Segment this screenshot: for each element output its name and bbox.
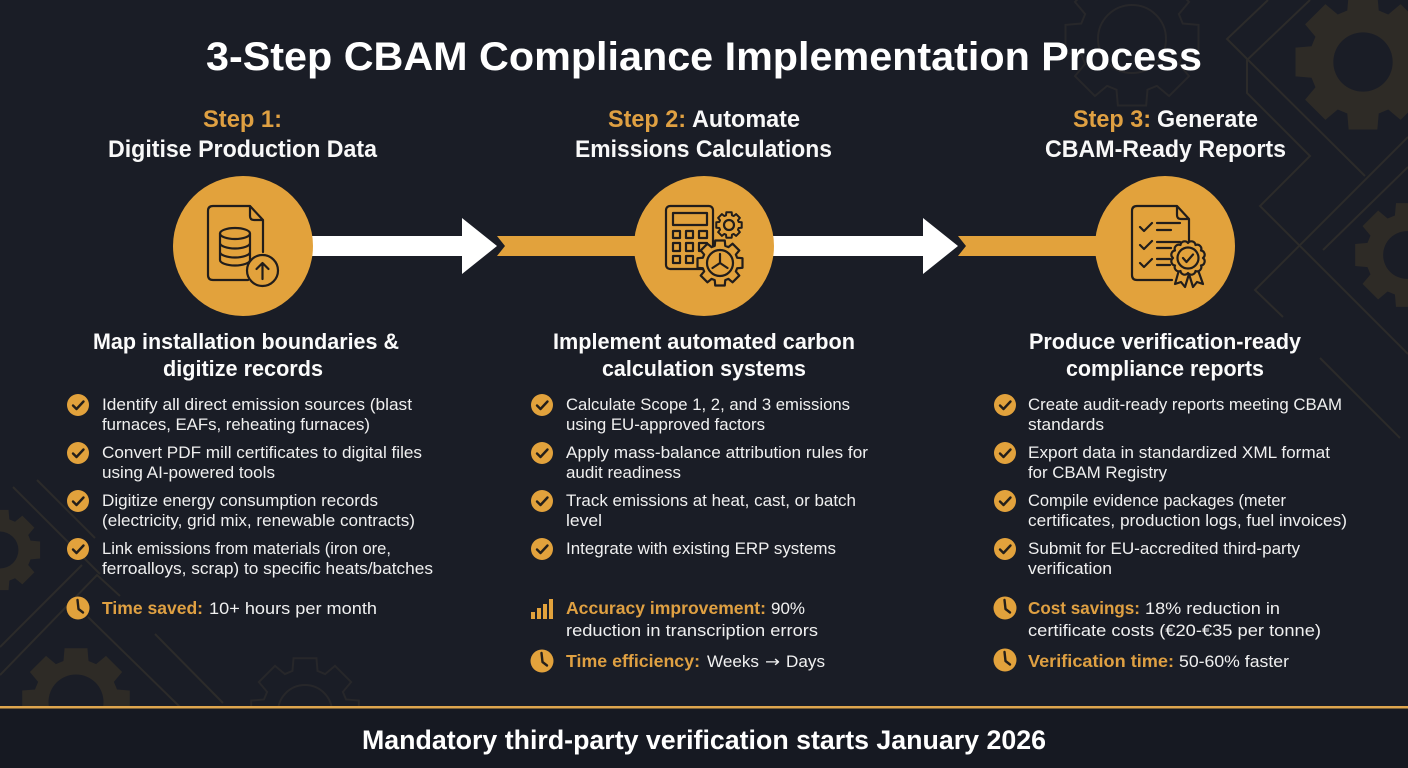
bullet: audit-ready reports bbox=[994, 394, 1342, 434]
bullet: third-party verification: Submit for EU-accredited third-party bbox=[1028, 539, 1300, 558]
bullet: scope emissions bbox=[531, 394, 850, 434]
metric: time efficiency bbox=[530, 650, 825, 672]
arrow: step 1 to step 2 bbox=[305, 218, 497, 274]
bullet: link materials: Link emissions from materials (iron ore, bbox=[102, 539, 391, 558]
footer banner: Mandatory third-party verification starts January 2026 bbox=[362, 725, 1046, 755]
heading: step 1: Step 1: bbox=[203, 106, 282, 133]
metric: cost savings bbox=[994, 596, 1321, 640]
panel: step 1 bbox=[66, 106, 433, 620]
bullet: third-party verification bbox=[994, 538, 1300, 578]
bullet: track emissions bbox=[531, 490, 856, 530]
bullet: evidence packages: certificates, production logs, fuel invoices) bbox=[1028, 511, 1347, 530]
subheading: step 3 bbox=[1029, 329, 1302, 381]
title: 3-Step CBAM Compliance Implementation Process bbox=[206, 35, 1202, 79]
bullet: track emissions: Track emissions at heat, cast, or batch bbox=[566, 491, 856, 510]
bullet: mass-balance rules: audit readiness bbox=[566, 463, 681, 482]
bullet: emission sources: furnaces, EAFs, reheating furnaces) bbox=[102, 415, 370, 434]
metric: time efficiency: Weeks bbox=[707, 652, 759, 671]
metric: cost savings: certificate costs (€20-€35 per tonne) bbox=[1028, 621, 1321, 640]
metric: time saved: 10+ hours per month bbox=[209, 599, 377, 618]
heading: step 2 bbox=[575, 106, 832, 163]
bullet: XML export bbox=[994, 442, 1330, 482]
heading: step 1: Digitise Production Data bbox=[108, 136, 378, 163]
bullet: energy records bbox=[67, 490, 415, 530]
bullet: mass-balance rules bbox=[531, 442, 868, 482]
bullet: link materials bbox=[67, 538, 433, 578]
subheading: step 1: digitize records bbox=[163, 356, 323, 381]
bullet: energy records: Digitize energy consumption records bbox=[102, 491, 378, 510]
bullet: mill certificates bbox=[67, 442, 422, 482]
metric: time efficiency: → bbox=[765, 652, 780, 671]
heading: step 1 bbox=[108, 106, 378, 163]
metric: verification time bbox=[994, 648, 1289, 672]
subheading: step 2: Implement automated carbon bbox=[553, 329, 855, 354]
metric: verification time: 50-60% faster bbox=[1179, 652, 1289, 671]
metric: accuracy improvement: Accuracy improvement: bbox=[566, 598, 766, 618]
arrow: step 2 to step 3 bbox=[766, 218, 958, 274]
bullet: evidence packages: Compile evidence packages (meter bbox=[1028, 491, 1286, 510]
icon: checklist with award badge bbox=[1095, 176, 1235, 316]
metric: time saved: Time saved: bbox=[102, 598, 203, 618]
heading: step 2: Automate bbox=[692, 106, 800, 133]
bullet: scope emissions: using EU-approved factors bbox=[566, 415, 765, 434]
subheading: step 3: Produce verification-ready bbox=[1029, 329, 1302, 354]
arrow: gold connector into step 3 bbox=[958, 236, 1100, 256]
bullet: third-party verification: verification bbox=[1028, 559, 1112, 578]
bullet: XML export: for CBAM Registry bbox=[1028, 463, 1167, 482]
bullet: scope emissions: Calculate Scope 1, 2, and 3 emissions bbox=[566, 395, 850, 414]
arrow: gold connector into step 2 bbox=[497, 236, 640, 256]
bullet: emission sources bbox=[67, 394, 412, 434]
icon: calculator with gears bbox=[634, 176, 774, 316]
panel: step 3 bbox=[994, 106, 1347, 672]
metric: accuracy improvement: 90% bbox=[771, 599, 805, 618]
bullet: evidence packages bbox=[994, 490, 1347, 530]
bullet: XML export: Export data in standardized XML format bbox=[1028, 443, 1330, 462]
bullet: track emissions: level bbox=[566, 511, 602, 530]
metric: time efficiency: Days bbox=[786, 652, 825, 671]
heading: step 3: Generate bbox=[1157, 106, 1258, 133]
heading: step 3: Step 3: bbox=[1073, 106, 1151, 133]
heading: step 3: CBAM-Ready Reports bbox=[1045, 136, 1286, 163]
subheading: step 2: calculation systems bbox=[602, 356, 806, 381]
bullet: audit-ready reports: standards bbox=[1028, 415, 1104, 434]
metric: cost savings: 18% reduction in bbox=[1145, 599, 1280, 618]
panel: step 2 bbox=[530, 106, 868, 672]
metric: verification time: Verification time: bbox=[1028, 651, 1174, 671]
metric: cost savings: Cost savings: bbox=[1028, 598, 1140, 618]
bullet: mill certificates: using AI-powered tools bbox=[102, 463, 275, 482]
subheading: step 3: compliance reports bbox=[1066, 356, 1264, 381]
icon: document with database and upload bbox=[173, 176, 313, 316]
bullet: link materials: ferroalloys, scrap) to specific heats/batches bbox=[102, 559, 433, 578]
footer banner bbox=[0, 706, 1408, 768]
heading: step 2: Emissions Calculations bbox=[575, 136, 832, 163]
bullet: energy records: (electricity, grid mix, renewable contracts) bbox=[102, 511, 415, 530]
bullet: mass-balance rules: Apply mass-balance attribution rules for bbox=[566, 443, 868, 462]
metric: accuracy improvement bbox=[531, 598, 818, 640]
metric: accuracy improvement: reduction in transcription errors bbox=[566, 621, 818, 640]
bullet: ERP integration: Integrate with existing ERP systems bbox=[566, 539, 836, 558]
metric: time saved bbox=[66, 596, 377, 620]
heading: step 2: Step 2: bbox=[608, 106, 686, 133]
subheading: step 1: Map installation boundaries & bbox=[93, 329, 399, 354]
metric: time efficiency: Time efficiency: bbox=[566, 651, 700, 671]
subheading: step 2 bbox=[553, 329, 855, 381]
heading: step 3 bbox=[1045, 106, 1286, 163]
bullet: emission sources: Identify all direct emission sources (blast bbox=[102, 395, 412, 414]
bullet: mill certificates: Convert PDF mill certificates to digital files bbox=[102, 443, 422, 462]
subheading: step 1 bbox=[93, 329, 399, 381]
bullet: audit-ready reports: Create audit-ready reports meeting CBAM bbox=[1028, 395, 1342, 414]
